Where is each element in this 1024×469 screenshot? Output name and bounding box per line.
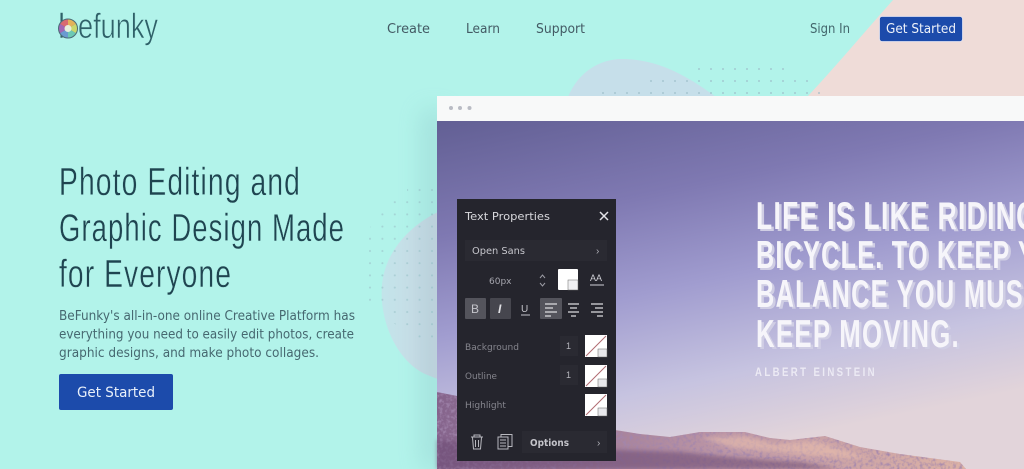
call to action button: Get Started bbox=[77, 385, 155, 401]
background: top lavender blob bbox=[568, 59, 716, 97]
navigation: Create: Create bbox=[387, 22, 430, 37]
heading: Photo Editing and bbox=[59, 161, 301, 204]
logo: wordmark: efunky bbox=[78, 7, 158, 46]
photo sky bbox=[437, 121, 1024, 469]
description text: graphic designs, and make photo collages. bbox=[59, 346, 319, 361]
background row: 1 bbox=[566, 341, 571, 351]
call to action button bbox=[59, 374, 173, 410]
outline row bbox=[465, 365, 607, 387]
background row bbox=[465, 335, 607, 357]
text properties panel bbox=[457, 199, 616, 461]
photo mountains bbox=[437, 392, 966, 469]
browser window shadow bbox=[422, 110, 446, 469]
font selector: Open Sans bbox=[472, 246, 525, 257]
formatting buttons: I bbox=[498, 302, 502, 316]
outline row: 1 bbox=[566, 370, 571, 380]
navigation: Support: Support bbox=[536, 22, 585, 37]
background: peach corner shape bbox=[808, 0, 1024, 96]
font size field: 60px bbox=[489, 277, 512, 287]
highlight row bbox=[465, 394, 607, 416]
font selector bbox=[465, 240, 607, 261]
description text bbox=[59, 309, 355, 361]
background: dot pattern top bbox=[598, 64, 826, 97]
browser title bar bbox=[437, 96, 1024, 121]
icon: close bbox=[600, 212, 608, 220]
options button bbox=[522, 431, 607, 453]
panel background bbox=[457, 199, 616, 461]
quote text bbox=[756, 195, 1024, 358]
outline row: Outline bbox=[465, 372, 497, 382]
font size field bbox=[489, 275, 545, 287]
browser window bbox=[437, 96, 1024, 469]
description text: everything you need to easily edit photos, create bbox=[59, 328, 354, 342]
icon: trash bbox=[471, 435, 483, 449]
quote attribution: ALBERT EINSTEIN bbox=[755, 365, 877, 379]
navigation button: Get Started: Get Started bbox=[886, 22, 956, 37]
navigation button: Get Started bbox=[880, 16, 962, 42]
navigation: Learn: Learn bbox=[466, 22, 500, 37]
options button: Options bbox=[530, 438, 569, 449]
panel title: Text Properties bbox=[464, 211, 550, 223]
formatting buttons: B bbox=[471, 302, 479, 316]
background: dot pattern left bbox=[366, 186, 437, 345]
background row: Background bbox=[465, 343, 519, 353]
heading: for Everyone bbox=[59, 253, 232, 296]
background: left lavender blob bbox=[382, 211, 440, 380]
highlight row: Highlight bbox=[465, 401, 506, 411]
colour swatch bbox=[558, 269, 578, 290]
logo bbox=[58, 7, 158, 46]
icon: duplicate bbox=[498, 434, 512, 449]
logo: colour wheel bbox=[58, 19, 78, 38]
font selector: › bbox=[596, 246, 599, 257]
formatting buttons bbox=[465, 298, 603, 319]
logo: wordmark: b bbox=[58, 7, 76, 46]
icon: letter spacing: AA bbox=[590, 273, 602, 283]
heading: Graphic Design Made bbox=[59, 207, 345, 250]
description text: BeFunky's all-in-one online Creative Platform has bbox=[59, 309, 355, 324]
navigation: Sign In: Sign In bbox=[810, 22, 850, 37]
heading bbox=[59, 161, 345, 296]
formatting buttons: U bbox=[521, 304, 528, 315]
browser dots bbox=[449, 106, 472, 110]
options button: › bbox=[597, 438, 600, 449]
